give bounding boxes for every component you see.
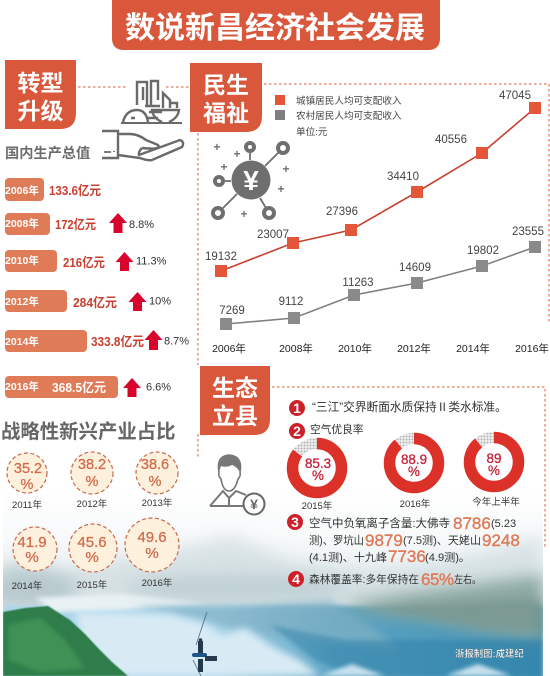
line chart: urban and rural income: 2014年 (456, 342, 490, 355)
legend: income lines: 城镇居民人均可支配收入 (296, 95, 402, 107)
background photo: misty lake (3, 524, 543, 676)
bar: 2016 GDP: 368.5亿元 (52, 380, 106, 395)
bar: 2010 GDP: 11.3% (136, 256, 167, 268)
bar: 2008 GDP: 8.8% (129, 219, 154, 231)
item 3: negative oxygen ions: 测)、罗坑山 (309, 533, 364, 547)
legend: income lines: 单位:元 (296, 126, 328, 138)
section tab: 转型升级 (5, 60, 76, 129)
title banner (112, 0, 440, 50)
circle: 2015 45.6%: % (85, 549, 99, 566)
circle: 2013 38.6%: 38.6 (141, 457, 169, 473)
bar: 2010 GDP: 216亿元 (63, 255, 105, 270)
bar: 2008 GDP (5, 213, 154, 235)
item 4: forest coverage: 左右。 (454, 572, 481, 586)
line chart: urban and rural income: 2010年 (338, 342, 372, 355)
circle: 2012 38.2%: 38.2 (78, 457, 106, 473)
bar: 2012 GDP: 2012年 (5, 295, 39, 308)
line chart: urban and rural income: 2012年 (397, 342, 431, 355)
heading: 国内生产总值: 国内生产总值 (5, 145, 90, 162)
circle: 2014 41.9%: 2014年 (12, 580, 43, 592)
icon: yen with network of circles: + (213, 140, 221, 154)
credit: 浙报制图:成建纪 (455, 648, 524, 659)
item 1: water quality: “三江”交界断面水质保持Ⅱ类水标准。 (312, 400, 507, 414)
legend: income lines: 农村居民人均可支配收入 (296, 110, 402, 122)
circle: 2015 45.6% (69, 524, 117, 591)
title banner: 数说新昌经济社会发展 (125, 12, 425, 45)
line chart: urban and rural income: 40556 (435, 134, 467, 146)
bar: 2016 GDP: 2016年 (5, 380, 39, 393)
circle: 2016 49.6% (125, 518, 179, 589)
circle: 2011 35.2%: 35.2 (14, 461, 42, 477)
item 3: negative oxygen ions: 7736 (388, 547, 426, 566)
item 3: negative oxygen ions: 3 (291, 514, 299, 530)
line chart: urban and rural income: 7269 (219, 305, 245, 317)
icon: yen with network of circles: ¥ (243, 165, 259, 196)
icon: yen with network of circles (213, 140, 290, 221)
line chart: urban and rural income: 9112 (279, 296, 303, 308)
bar: 2010 GDP (5, 250, 167, 272)
circle: 2014 41.9%: % (25, 549, 39, 566)
icon: yen with network of circles: + (240, 207, 248, 221)
bar: 2006 GDP: 133.6亿元 (49, 183, 101, 198)
item 2: air quality heading (289, 423, 364, 439)
item 4: forest coverage (288, 570, 481, 589)
circle: 2014 41.9%: 41.9 (17, 534, 47, 551)
section tab: 生态立县: 立县 (212, 403, 258, 429)
donut: first half 89%: 89 (487, 451, 501, 466)
item 3: negative oxygen ions: (5.23 (491, 518, 516, 530)
item 2: air quality heading: 2 (293, 423, 301, 439)
donut: 2016 88.9%: 2016年 (400, 498, 431, 510)
item 4: forest coverage: 森林覆盖率:多年保持在 (309, 572, 419, 586)
donut: first half 89%: 今年上半年 (472, 496, 520, 508)
bar: 2016 GDP (5, 376, 171, 398)
circle: 2016 49.6%: 2016年 (142, 577, 173, 589)
line chart: urban and rural income: 19132 (205, 251, 237, 263)
legend: income lines (275, 95, 402, 138)
circle: 2014 41.9% (12, 527, 57, 592)
circle: 2012 38.2% (71, 452, 113, 510)
icon: person with yen badge (210, 455, 264, 514)
line chart: urban and rural income: 2016年 (515, 342, 549, 355)
section tab: 民生福祉: 民生 (203, 72, 249, 98)
line chart: urban and rural income: 34410 (387, 171, 419, 183)
line chart: urban and rural income: 27396 (326, 206, 358, 218)
circle: 2011 35.2%: % (21, 477, 34, 493)
line chart: urban and rural income: 14609 (399, 262, 431, 274)
item 2: air quality heading: 空气优良率 (310, 423, 364, 436)
icon: yen with network of circles: + (220, 160, 228, 174)
bar: 2008 GDP: 2008年 (5, 217, 39, 230)
circle: 2013 38.6% (136, 452, 178, 509)
circle: 2015 45.6%: 2015年 (77, 579, 108, 591)
line chart: urban and rural income: 23007 (257, 229, 289, 241)
heading: 战略性新兴产业占比: 战略性新兴产业占比 (1, 420, 176, 443)
photo: green riverbank bush (3, 606, 128, 676)
circle: 2013 38.6%: % (149, 474, 162, 490)
bar: 2012 GDP: 284亿元 (73, 295, 117, 310)
item 3: negative oxygen ions: 空气中负氧离子含量:大佛寺 (309, 516, 450, 530)
icon: factory over open hand (102, 81, 183, 160)
bar: 2008 GDP: 172亿元 (55, 217, 96, 232)
circle: 2016 49.6%: 49.6 (137, 529, 167, 546)
line chart: urban and rural income: 47045 (499, 90, 531, 102)
photo: fisherman on boat (192, 612, 217, 676)
bar: 2006 GDP (5, 178, 101, 201)
donut: first half 89%: % (488, 463, 500, 478)
line chart: urban and rural income: 11263 (342, 277, 374, 289)
bar: 2016 GDP: 6.6% (146, 382, 171, 394)
circle: 2012 38.2%: 2012年 (77, 498, 108, 510)
section tab: 生态立县: 生态 (212, 375, 258, 401)
bar: 2010 GDP: 2010年 (5, 254, 39, 267)
item 3: negative oxygen ions: (7.5测)、天姥山 (403, 533, 481, 547)
item 3: negative oxygen ions: (4.9测)。 (425, 551, 470, 564)
circle: 2011 35.2%: 2011年 (12, 499, 42, 511)
bar: 2014 GDP: 2014年 (5, 335, 39, 348)
bar: 2014 GDP (5, 330, 189, 352)
section tab: 民生福祉: 福祉 (203, 100, 249, 126)
item 1: water quality: 1 (293, 400, 301, 416)
icon: yen with network of circles: + (233, 147, 241, 161)
bar: 2014 GDP: 333.8亿元 (91, 334, 144, 349)
section tab: 转型升级: 转型 (18, 70, 64, 96)
item 3: negative oxygen ions: 8786 (453, 514, 491, 533)
bar: 2014 GDP: 8.7% (164, 336, 189, 348)
donut: 2015 85.3%: 2015年 (302, 500, 333, 512)
item 3: negative oxygen ions: 9879 (365, 531, 403, 550)
donut: 2015 85.3%: % (312, 468, 324, 483)
circle: 2015 45.6%: 45.6 (77, 534, 107, 551)
item 4: forest coverage: 4 (292, 571, 300, 587)
bar: 2006 GDP: 2006年 (5, 184, 39, 197)
item 3: negative oxygen ions (287, 514, 520, 566)
donut: first half 89% (470, 438, 520, 508)
bar: 2012 GDP: 10% (149, 296, 171, 308)
item 3: negative oxygen ions: (4.1测)、十九峰 (309, 550, 387, 564)
circle: 2016 49.6%: % (145, 545, 159, 562)
donut: 2016 88.9%: 88.9 (401, 452, 427, 467)
donut: 2015 85.3% (292, 444, 342, 512)
section tab: 转型升级: 升级 (18, 98, 64, 124)
icon: yen with network of circles: + (282, 162, 290, 176)
bar: 2012 GDP (5, 290, 171, 312)
section tab: 民生福祉 (190, 63, 262, 132)
item 3: negative oxygen ions: 9248 (482, 531, 520, 550)
circle: 2013 38.6%: 2013年 (142, 497, 173, 509)
line chart: urban and rural income: 2008年 (279, 342, 313, 355)
item 4: forest coverage: 65% (421, 570, 454, 589)
icon: person with yen badge: ¥ (250, 496, 258, 512)
line chart: urban and rural income (205, 90, 549, 355)
line chart: urban and rural income: 23555 (512, 226, 544, 238)
donut: 2015 85.3%: 85.3 (305, 456, 331, 471)
circle: 2011 35.2% (7, 453, 47, 511)
circle: 2012 38.2%: % (86, 474, 99, 490)
icon: yen with network of circles: + (277, 182, 285, 196)
line chart: urban and rural income: 19802 (467, 245, 499, 257)
section tab: 生态立县 (200, 366, 270, 435)
donut: 2016 88.9%: % (408, 464, 420, 479)
donut: 2016 88.9% (390, 438, 438, 510)
line chart: urban and rural income: 2006年 (212, 342, 246, 355)
